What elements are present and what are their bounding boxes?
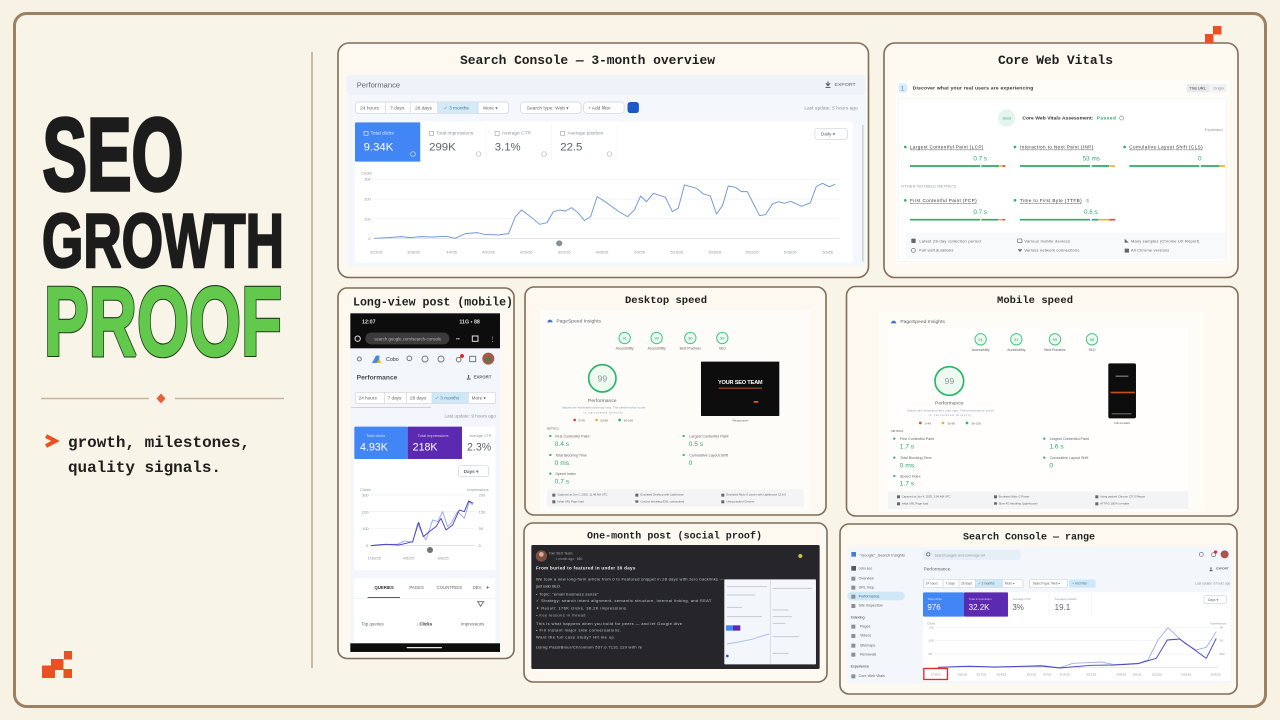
screenshot: performance with sidebar: 50 <box>929 652 932 656</box>
subtitle line 2: quality signals. <box>68 459 221 477</box>
screenshot: performance report: 4/22/26 <box>558 250 570 254</box>
panel: One-month post social proof <box>524 523 827 682</box>
screenshot: PageSpeed desktop: Cumulative Layout Shift <box>689 453 728 457</box>
screenshot: social post: Your SEO Team <box>549 551 573 555</box>
screenshot: phone performance report <box>350 313 500 652</box>
screenshot: field data: First Contentful Paint (FCP) <box>910 198 977 203</box>
screenshot: field data: Largest Contentful Paint (LCP) <box>910 145 984 150</box>
screenshot: PageSpeed mobile: 90-100 <box>972 421 981 425</box>
screenshot: performance with sidebar: 28 days <box>961 582 972 586</box>
panel: Search Console range <box>840 524 1237 694</box>
vertical divider <box>311 52 313 668</box>
screenshot: performance report: 5/10/26 <box>671 250 683 254</box>
screenshot: field data: Full visit durations <box>919 248 953 253</box>
screenshot: performance with sidebar: 4/7/25 <box>1043 672 1052 676</box>
screenshot: phone performance report: EXPORT <box>474 375 492 380</box>
screenshot: field data: Various mobile devices <box>1024 238 1070 243</box>
callout: red date highlight: 1/30/25 <box>931 672 941 676</box>
screenshot: phone performance report: 0 <box>479 543 482 548</box>
screenshot: performance report: 3/28/26 <box>407 250 420 254</box>
screenshot: PageSpeed desktop: Captured at Jun 1, 2025, 11:46 AM UTC <box>557 493 608 497</box>
heading: Desktop speed <box>625 295 707 307</box>
subtitle text block <box>46 434 250 477</box>
screenshot: performance with sidebar: Site Inspection <box>859 604 883 608</box>
screenshot: social post: We took a new long-form article from 0 to Featured snippet in 28 days with zero backlinks — <box>536 576 724 581</box>
screenshot: field data: 0 <box>1198 155 1202 162</box>
screenshot: performance with sidebar: 19.1 <box>1055 603 1071 612</box>
screenshot: PageSpeed desktop: 99 <box>598 373 607 383</box>
screenshot: social post: just solid SEO. <box>535 584 561 589</box>
screenshot: PageSpeed mobile: Cumulative Layout Shift <box>1050 456 1088 460</box>
screenshot: PageSpeed desktop: Total Blocking Time <box>555 453 587 457</box>
screenshot: performance report: Last update: 5 hours ago <box>804 105 858 111</box>
screenshot: performance with sidebar: Impressions <box>1210 621 1227 625</box>
heading: Search Console — 3-month overview <box>460 53 715 68</box>
screenshot: performance report: 4/28/26 <box>596 250 608 254</box>
screenshot: social post: • Key lessons in thread <box>536 612 585 617</box>
screenshot: PageSpeed mobile: is calculated directly. <box>929 413 972 417</box>
screenshot: phone performance report: 6/9/25 <box>438 556 450 561</box>
screenshot: PageSpeed desktop: Accessibility <box>648 347 666 351</box>
panel: Desktop speed <box>525 287 826 515</box>
screenshot: PageSpeed mobile: 91 <box>1014 337 1019 342</box>
screenshot: phone performance report: 200 <box>362 509 369 514</box>
screenshot: performance report: 3.1% <box>495 142 521 154</box>
title line: PROOF: PROOF <box>44 266 282 376</box>
screenshot: performance with sidebar: Experience <box>851 665 869 669</box>
screenshot: performance report: Average position <box>567 131 604 137</box>
screenshot: PageSpeed desktop: is calculated directly. <box>584 410 624 414</box>
screenshot: PageSpeed desktop: 0.7 s <box>555 478 570 485</box>
screenshot: field data: Time to First Byte (TTFB) <box>1020 198 1082 203</box>
screenshot: PageSpeed desktop: Initial URL Page load <box>557 499 584 503</box>
screenshot: phone performance report: Days ▾ <box>464 469 479 474</box>
screenshot: performance with sidebar: 5/26/25 <box>1211 672 1221 676</box>
screenshot: PageSpeed desktop: YOUR SEO TEAM <box>718 380 763 386</box>
screenshot: performance with sidebar: 4/21/25 <box>1086 672 1097 676</box>
screenshot: PageSpeed mobile: 0 <box>1049 462 1053 469</box>
screenshot: social post: From buried to featured in under 30 days <box>536 565 636 570</box>
screenshot: PageSpeed desktop: Speed Index <box>555 472 576 476</box>
screenshot: PageSpeed mobile: 1.6 s <box>1049 444 1064 451</box>
screenshot: social post: Want the full case study? Hit me up. <box>536 634 615 639</box>
screenshot: phone performance report: Impressions <box>461 622 484 627</box>
screenshot: field data: Origin <box>1213 86 1224 91</box>
screenshot: PageSpeed mobile: 0-49 <box>925 421 931 425</box>
screenshot: PageSpeed mobile: 0 ms <box>900 462 915 469</box>
screenshot: PageSpeed desktop: 0.5 s <box>689 441 704 448</box>
screenshot: PageSpeed desktop: Responsive <box>733 418 748 422</box>
screenshot: social post: 1 month ago · 860 <box>555 557 582 561</box>
screenshot: phone performance report: DEV <box>473 585 482 590</box>
screenshot: performance report: Performance <box>357 80 400 89</box>
screenshot: field data: 0.7 s <box>973 209 987 216</box>
screenshot: PageSpeed desktop <box>540 310 810 512</box>
heading: Core Web Vitals <box>998 53 1113 68</box>
screenshot: performance report: Daily ▾ <box>821 132 836 138</box>
screenshot: phone performance report: Clicks <box>360 487 371 492</box>
screenshot: performance with sidebar: 5/5/25 <box>1133 672 1142 676</box>
screenshot: phone performance report: 4.93K <box>360 442 388 454</box>
icon: pixel logo bottom left <box>42 651 72 678</box>
screenshot: PageSpeed desktop: Values are estimated and may vary. The performance score <box>562 406 646 410</box>
screenshot: performance with sidebar: More ▾ <box>1005 582 1015 586</box>
screenshot: PageSpeed mobile: Emulated Moto G Power <box>999 495 1030 499</box>
screenshot: performance with sidebar: 2K <box>1220 625 1223 629</box>
screenshot: PageSpeed desktop: Best Practices <box>680 347 701 351</box>
heading: One-month post (social proof) <box>587 530 762 542</box>
screenshot: performance report: + Add filter <box>588 105 611 111</box>
screenshot: phone performance report: 24 hours <box>359 396 377 401</box>
screenshot: PageSpeed mobile: 1.7 s <box>900 480 915 487</box>
screenshot: field data: Expanded <box>1205 127 1223 132</box>
screenshot: PageSpeed mobile <box>878 312 1205 512</box>
panel: Search Console 3-month overview <box>338 43 868 278</box>
heading: Mobile speed <box>997 295 1073 307</box>
screenshot: performance report: 4/4/26 <box>446 250 457 254</box>
screenshot: phone performance report: 300 <box>362 493 369 498</box>
screenshot: field data: ⚗ <box>1085 198 1090 203</box>
screenshot: PageSpeed mobile: 99 <box>945 376 954 386</box>
screenshot: phone performance report: 4/5/25 <box>403 556 415 561</box>
screenshot: PageSpeed mobile: Accessibility <box>1007 348 1026 352</box>
screenshot: performance with sidebar: 24 hours <box>926 582 938 586</box>
screenshot: performance with sidebar: Last update: 6 hours ago <box>1195 582 1231 586</box>
screenshot: performance report: 5/28/26 <box>784 250 796 254</box>
screenshot: social post: • Topic: "email business sense" <box>536 591 599 596</box>
screenshot: performance report: 0 <box>368 237 371 241</box>
screenshot: social post: ✦ Result: 176K clicks, 38.2K impressions <box>536 606 626 611</box>
screenshot: performance report: 5/4/26 <box>634 250 645 254</box>
screenshot: PageSpeed mobile: Speed Index <box>900 474 921 478</box>
screenshot: PageSpeed mobile: Slow 4G throttling (Lighthouse) <box>999 502 1038 506</box>
screenshot: performance with sidebar: URL Insp. <box>859 586 875 590</box>
panel: Core Web Vitals <box>884 43 1238 278</box>
screenshot: phone performance report: 0 <box>366 543 369 548</box>
screenshot: field data: Passed <box>1097 115 1116 121</box>
screenshot: field data: Interaction to Next Paint (INP) <box>1020 145 1094 150</box>
screenshot: phone performance report: ↓ Clicks <box>416 622 433 627</box>
screenshot: performance with sidebar <box>847 547 1231 683</box>
screenshot: PageSpeed mobile: METRICS <box>891 429 904 433</box>
screenshot: performance with sidebar: 976 <box>927 603 941 612</box>
screenshot: PageSpeed mobile: Accessibility <box>972 348 990 352</box>
screenshot: PageSpeed mobile: Best Practices <box>1044 348 1066 352</box>
screenshot: field data: 0.7 s <box>973 155 987 162</box>
screenshot: performance report: 200 <box>364 197 371 201</box>
screenshot: performance report: EXPORT <box>835 82 856 88</box>
screenshot: performance with sidebar: Pages <box>860 624 871 628</box>
screenshot: performance with sidebar: 1K <box>1220 639 1223 643</box>
icon: pixel accent top right <box>1205 26 1222 43</box>
screenshot: performance with sidebar: "Google"_Search Insights <box>860 552 905 557</box>
screenshot: performance with sidebar: 4/14/25 <box>1060 672 1070 676</box>
screenshot: performance report: 299K <box>429 142 456 154</box>
screenshot: performance with sidebar: Average position <box>1055 597 1077 601</box>
screenshot: performance with sidebar: 150 <box>929 625 934 629</box>
screenshot: performance with sidebar: 500 <box>1220 652 1225 656</box>
screenshot: performance with sidebar: 5/12/25 <box>1152 672 1162 676</box>
screenshot: performance report: ✓ 3 months <box>444 105 469 111</box>
callout: red date highlight <box>924 668 947 679</box>
screenshot: PageSpeed mobile: 99 <box>1053 337 1058 342</box>
screenshot: phone performance report: Top queries <box>361 622 384 627</box>
screenshot: field data: Core Web Vitals Assessment: <box>1022 115 1094 121</box>
screenshot: performance report: 100 <box>364 217 371 221</box>
subtitle lines: growth, milestones, <box>68 434 250 452</box>
screenshot: performance with sidebar: cobo.seo <box>859 567 872 571</box>
screenshot: performance with sidebar: Days ▾ <box>1208 598 1218 602</box>
screenshot: phone performance report: 150 <box>479 509 486 514</box>
screenshot: PageSpeed desktop: Emulated Moto G power with Lighthouse 12.6.0 <box>726 493 786 497</box>
screenshot: phone performance report: 7 days <box>388 396 402 401</box>
screenshot: PageSpeed mobile: Full-Loaded <box>1114 421 1130 425</box>
screenshot: PageSpeed desktop: Largest Contentful Paint <box>689 434 729 438</box>
screenshot: phone performance report: COUNTRIES <box>437 585 462 590</box>
screenshot: phone performance report: 100 <box>362 526 369 531</box>
screenshot: PageSpeed mobile: HTTP/2 100% on-wake <box>1100 502 1130 506</box>
screenshot: phone performance report: 1/30/25 <box>368 556 382 561</box>
screenshot: performance with sidebar: Total clicks <box>927 597 942 601</box>
screenshot: phone performance report: Impressions <box>467 487 489 492</box>
screenshot: performance with sidebar: 3/17/25 <box>976 672 987 676</box>
screenshot: performance with sidebar: Total impressions <box>969 597 992 601</box>
screenshot: performance report: 22.5 <box>560 142 582 154</box>
screenshot: PageSpeed desktop: Performance <box>588 398 617 404</box>
screenshot: PageSpeed desktop: Accessibility <box>616 347 634 351</box>
screenshot: performance with sidebar: 32.2K <box>969 603 990 612</box>
screenshot: performance report: Total clicks <box>370 131 394 137</box>
screenshot: field data <box>896 80 1229 263</box>
screenshot: phone performance report: 12:07 <box>362 320 376 326</box>
screenshot: field data: Latest 28-day collection period <box>919 238 981 243</box>
screenshot: performance with sidebar: EXPORT <box>1216 567 1229 571</box>
screenshot: field data: Cumulative Layout Shift (CLS) <box>1129 145 1203 150</box>
screenshot: PageSpeed desktop: 91 <box>622 336 628 341</box>
screenshot: PageSpeed desktop: 0 ms <box>555 460 570 467</box>
screenshot: PageSpeed mobile: SEO <box>1088 348 1096 352</box>
screenshot: PageSpeed mobile: 91 <box>978 337 984 342</box>
screenshot: phone performance report: QUERIES <box>374 585 394 590</box>
screenshot: performance report: 6/3/26 <box>822 250 833 254</box>
screenshot: performance report: Total impressions <box>436 131 474 137</box>
screenshot: performance report: 5/16/26 <box>709 250 721 254</box>
screenshot: performance report: 24 hours <box>360 105 380 111</box>
screenshot: PageSpeed mobile: 1.7 s <box>900 444 915 451</box>
screenshot: phone performance report: 200 <box>479 493 486 498</box>
screenshot: PageSpeed desktop: 99 <box>654 336 660 341</box>
screenshot: PageSpeed desktop: 0 <box>689 460 693 467</box>
screenshot: PageSpeed mobile: PageSpeed Insights <box>900 319 945 325</box>
screenshot: performance report: 300 <box>364 177 371 181</box>
screenshot: PageSpeed mobile: 50-89 <box>947 421 955 425</box>
screenshot: PageSpeed mobile: Largest Contentful Paint <box>1050 437 1089 441</box>
screenshot: phone performance report: 218K <box>413 442 438 454</box>
screenshot: PageSpeed mobile: Captured at Jun 4, 2025, 3:04 AM UTC <box>902 495 951 499</box>
screenshot: PageSpeed desktop: Emulated Desktop with Lighthouse <box>640 493 684 497</box>
screenshot: social post <box>531 545 820 669</box>
title line: PROOF: PROOF <box>44 266 282 376</box>
screenshot: phone performance report: + <box>486 586 490 592</box>
panel: Long-view post mobile <box>338 288 514 658</box>
screenshot: field data: Discover what your real users are experiencing <box>913 86 1033 92</box>
screenshot: PageSpeed desktop: 90-100 <box>624 418 633 422</box>
screenshot: PageSpeed mobile: 98 <box>1090 337 1095 342</box>
screenshot: social post: • Fill instant major side conversations. <box>536 628 621 633</box>
screenshot: performance with sidebar: Indexing <box>851 616 864 620</box>
screenshot: PageSpeed desktop: 0.4 s <box>555 441 570 448</box>
screenshot: field data: 1 <box>901 85 905 92</box>
screenshot: performance report <box>346 75 866 267</box>
screenshot: field data: Various network connections <box>1024 248 1079 253</box>
screenshot: PageSpeed desktop: SEO <box>719 347 726 351</box>
screenshot: phone performance report: ⋮ <box>489 337 495 343</box>
screenshot: performance with sidebar: search pages and coverage.ref <box>935 553 986 557</box>
screenshot: performance with sidebar: 3% <box>1012 603 1024 612</box>
screenshot: performance with sidebar: 3/10/25 <box>957 672 968 676</box>
screenshot: phone performance report: PAGES <box>409 585 424 590</box>
screenshot: performance with sidebar: 7 days <box>946 582 955 586</box>
screenshot: phone performance report: Performance <box>357 375 398 382</box>
screenshot: PageSpeed mobile: Using packed Chrome 137.0 Report <box>1100 495 1145 499</box>
screenshot: PageSpeed mobile: First Contentful Paint <box>900 437 934 441</box>
screenshot: performance report: 4/16/26 <box>520 250 533 254</box>
screenshot: field data: 53 ms <box>1083 155 1100 162</box>
screenshot: PageSpeed desktop: Using packed Chrome <box>726 499 755 503</box>
screenshot: social post: ✓ Strategy: search intent alignment, semantic structure, internal linking, and EEAT <box>536 598 712 603</box>
screenshot: performance with sidebar: Removals <box>860 652 876 656</box>
screenshot: PageSpeed desktop: METRICS <box>547 427 559 431</box>
screenshot: field data: Many samples (Chrome UX Report) <box>1131 238 1200 243</box>
screenshot: performance report: Clicks <box>361 170 372 175</box>
screenshot: PageSpeed desktop: 99 <box>720 336 725 341</box>
icon: chevron <box>46 436 56 446</box>
title line: GROWTH: GROWTH <box>42 199 284 284</box>
screenshot: phone performance report: Last update: 9 hours ago <box>444 414 496 419</box>
screenshot: PageSpeed mobile: Initial URL Page load <box>902 502 929 506</box>
screenshot: performance report: 9.34K <box>364 142 394 154</box>
screenshot: PageSpeed desktop: 50-89 <box>600 418 608 422</box>
screenshot: phone performance report: Total clicks <box>366 433 385 438</box>
screenshot: performance report: 4/10/26 <box>482 250 495 254</box>
screenshot: phone performance report: 28 days <box>410 396 427 401</box>
screenshot: performance report: Average CTR <box>502 131 532 137</box>
screenshot: performance report: 28 days <box>415 105 433 111</box>
title line: SEO: SEO <box>42 97 184 212</box>
screenshot: PageSpeed desktop: 90 <box>688 336 693 341</box>
screenshot: performance with sidebar: + Add filter <box>1072 582 1087 586</box>
screenshot: phone performance report: Average CTR <box>469 434 492 438</box>
screenshot: performance with sidebar: Videos <box>860 634 871 638</box>
screenshot: performance report: 5/22/26 <box>746 250 758 254</box>
screenshot: field data: 0.6 s <box>1084 209 1098 216</box>
screenshot: performance report: 7 days <box>390 105 405 111</box>
screenshot: performance report: 3/23/26 <box>370 250 382 254</box>
screenshot: performance with sidebar: Performance <box>924 566 951 571</box>
screenshot: field data: This URL <box>1189 86 1207 91</box>
screenshot: field data: Good <box>1003 116 1011 120</box>
screenshot: performance with sidebar: 3/31/25 <box>1026 672 1037 676</box>
screenshot: phone performance report: More ▾ <box>472 396 487 401</box>
screenshot: performance report: More ▾ <box>483 105 498 111</box>
screenshot: PageSpeed desktop: 0-49 <box>579 418 585 422</box>
screenshot: phone performance report: Cobo <box>386 357 399 363</box>
screenshot: performance with sidebar: ✓ 3 months <box>978 582 995 586</box>
screenshot: field data: All Chrome versions <box>1131 248 1169 253</box>
screenshot: phone performance report: ✓ 3 months <box>435 396 460 401</box>
heading: Search Console — range <box>963 532 1095 544</box>
screenshot: performance with sidebar: Performance <box>859 594 880 598</box>
screenshot: PageSpeed mobile: Total Blocking Time <box>900 456 931 460</box>
screenshot: PageSpeed desktop: Custom throttling (DSL connection) <box>640 499 684 503</box>
screenshot: phone performance report: Total impressions <box>418 433 448 438</box>
screenshot: phone performance report: 50 <box>479 526 484 531</box>
divider with diamond <box>41 394 284 404</box>
screenshot: PageSpeed desktop: PageSpeed Insights <box>556 318 601 324</box>
screenshot: PageSpeed mobile: Values are estimated and may vary. The performance score <box>907 409 994 413</box>
screenshot: performance with sidebar: 100 <box>929 639 934 643</box>
screenshot: phone performance report: 11G ▪ 88 <box>459 320 480 326</box>
screenshot: PageSpeed desktop: First Contentful Paint <box>555 434 589 438</box>
screenshot: phone performance report: 2.3% <box>467 442 492 454</box>
screenshot: field data: OTHER NOTABLE METRICS <box>901 184 956 189</box>
screenshot: PageSpeed mobile: Performance <box>935 401 964 407</box>
screenshot: phone performance report: search.google.com/search-console <box>374 336 442 341</box>
screenshot: performance with sidebar: Sitemaps <box>860 643 875 647</box>
screenshot: performance with sidebar: Clicks <box>927 621 935 625</box>
title: SEO Growth Proof <box>42 97 284 376</box>
screenshot: performance report: Search type: Web ▾ <box>527 105 569 111</box>
screenshot: social post: Using PassiBiour/Chromium 537.0.7131.119 with fe <box>536 644 643 649</box>
panel: Mobile speed <box>846 286 1238 516</box>
screenshot: phone performance report: •• <box>456 337 460 343</box>
heading: Long-view post (mobile) <box>353 296 513 310</box>
screenshot: performance with sidebar: Average CTR <box>1013 597 1032 601</box>
screenshot: performance with sidebar: Overview <box>859 577 874 581</box>
title line: PROOF <box>44 266 282 376</box>
screenshot: performance with sidebar: Search type: Web ▾ <box>1033 582 1061 586</box>
screenshot: performance with sidebar: 3/24/25 <box>996 672 1007 676</box>
screenshot: social post: This is what happens when you build for peers — and let Google dive <box>536 621 683 626</box>
screenshot: performance with sidebar: 5/19/25 <box>1181 672 1192 676</box>
screenshot: performance with sidebar: 4/28/25 <box>1116 672 1127 676</box>
screenshot: performance with sidebar: Core Web Vitals <box>859 674 885 678</box>
